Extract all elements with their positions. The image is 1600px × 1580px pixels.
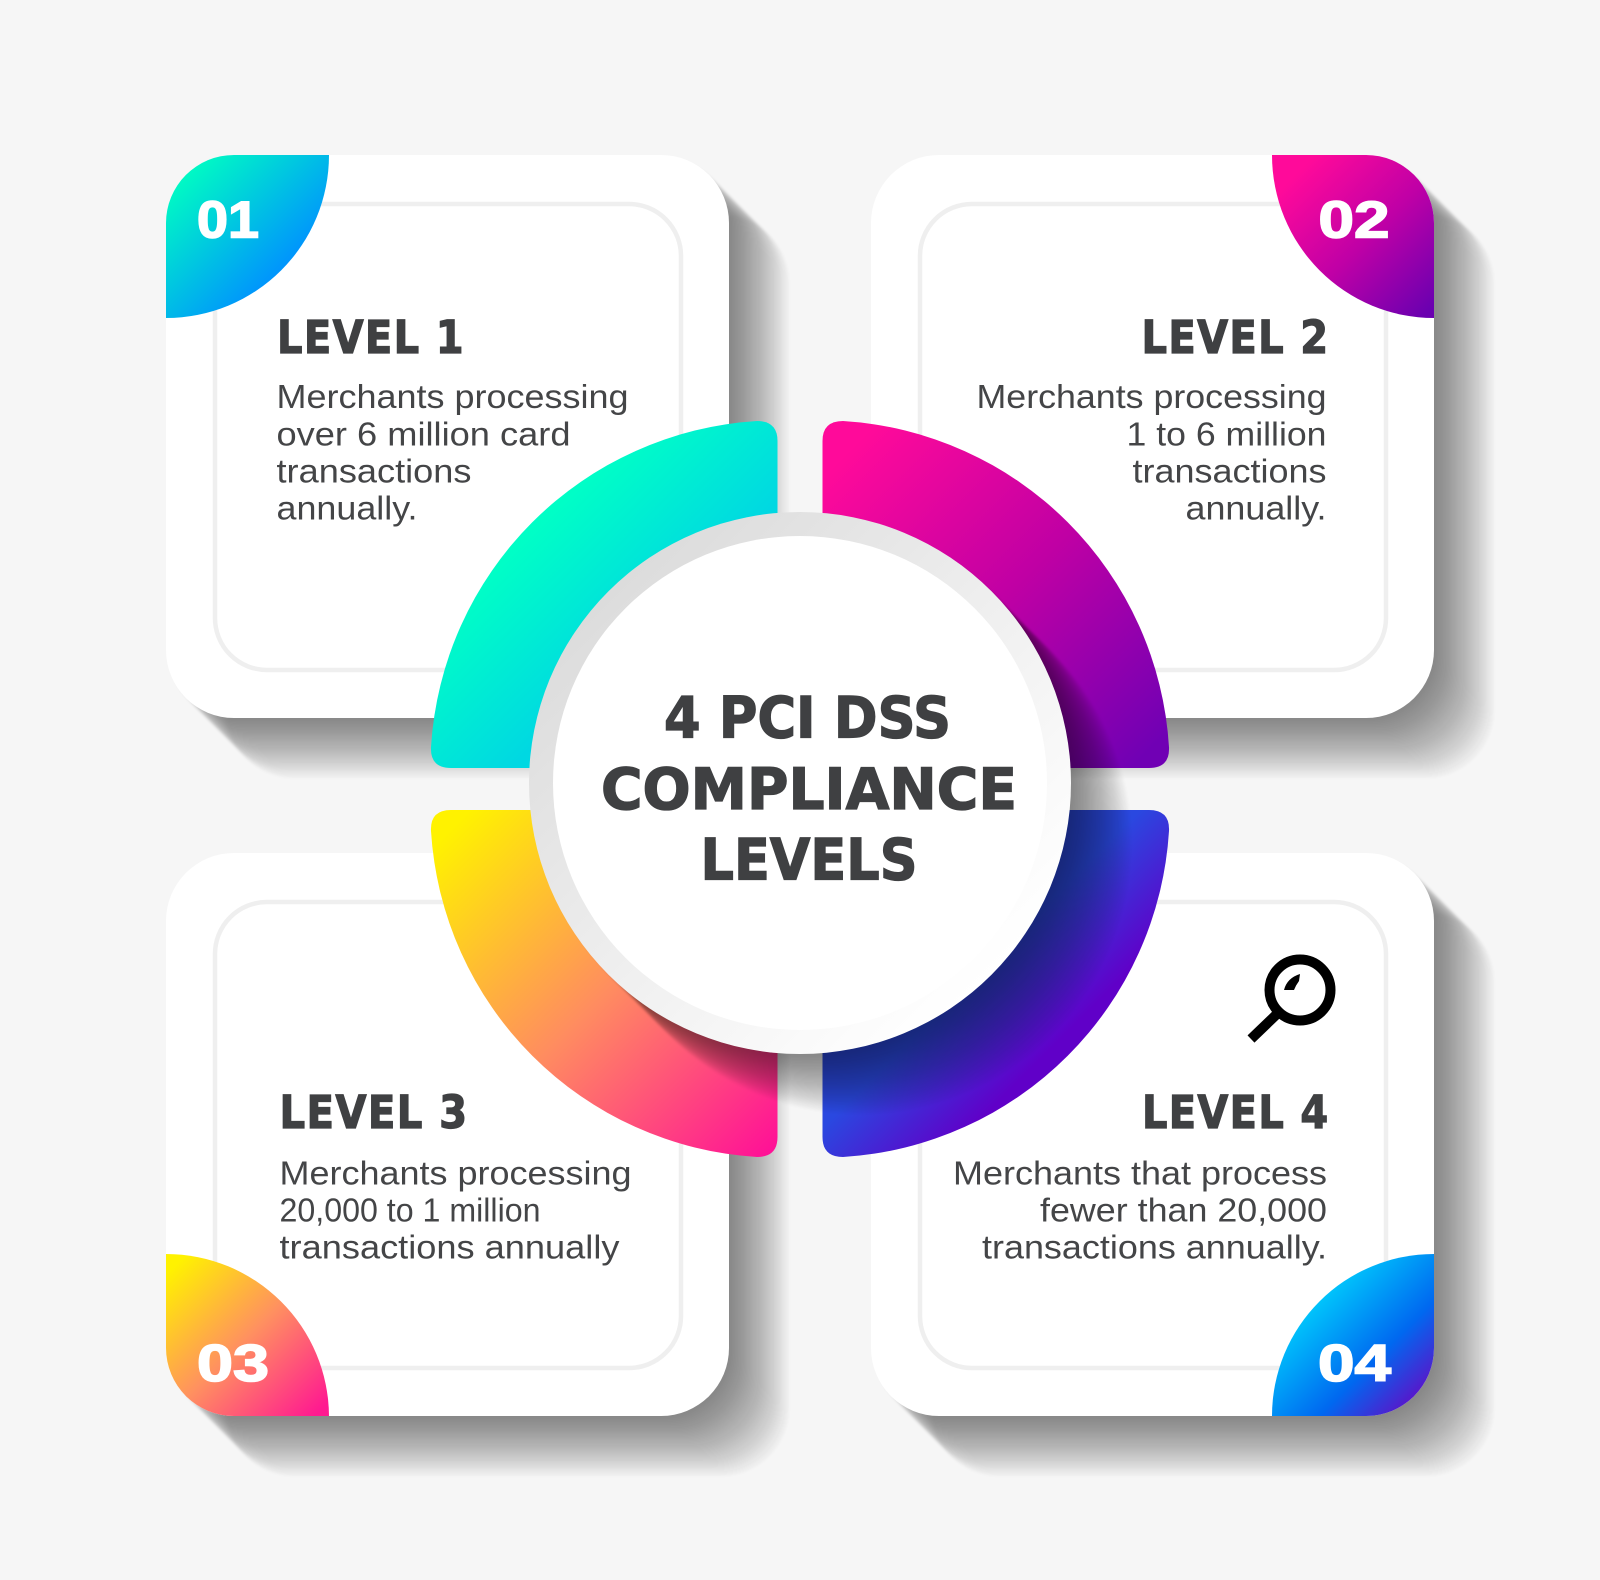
panel: level 1	[166, 155, 729, 718]
text: level 1 description: transactions	[276, 452, 472, 490]
text: level 3 description: transactions annually	[280, 1228, 620, 1266]
badge: 03	[166, 1254, 329, 1416]
arc: bottom left segment	[431, 810, 778, 1157]
text: level 4 description: transactions annually.	[982, 1228, 1327, 1266]
text: level 3 description: Merchants processing	[280, 1154, 632, 1192]
text: level 4 description: fewer than 20,000	[1040, 1192, 1327, 1228]
heading: level 3: LEVEL 3	[280, 1086, 468, 1139]
badge: 01	[166, 155, 329, 318]
text: level 4 description	[953, 1154, 1327, 1266]
card shadows	[169, 158, 1494, 1476]
text: level 4 description: Merchants that process	[953, 1154, 1327, 1192]
text: level 2 description: Merchants processing	[976, 378, 1326, 415]
heading: level 1: LEVEL 1	[277, 311, 465, 364]
text: level 1 description	[276, 378, 628, 526]
title: 4 PCI DSS	[664, 686, 951, 752]
badge: 02: 02	[1318, 192, 1390, 250]
arc: bottom right segment	[822, 810, 1169, 1157]
arc: top right segment	[822, 421, 1169, 768]
badge: 02	[1272, 155, 1434, 318]
heading: level 4: LEVEL 4	[1142, 1086, 1330, 1139]
badge: 04	[1272, 1254, 1434, 1416]
badge: 01: 01	[197, 192, 259, 250]
text: level 1 description: Merchants processing	[276, 378, 628, 415]
title: COMPLIANCE	[601, 757, 1017, 823]
text: level 2 description: annually.	[1186, 490, 1326, 526]
panel: level 3	[166, 853, 729, 1416]
badge: 04: 04	[1318, 1335, 1391, 1393]
centre circle shadow	[532, 515, 1131, 1114]
text: level 1 description: annually.	[276, 490, 418, 526]
heading: level 2: LEVEL 2	[1142, 311, 1330, 364]
text: level 2 description	[976, 378, 1326, 526]
panel: level 2	[871, 155, 1434, 718]
text: level 3 description: 20,000 to 1 million	[280, 1192, 540, 1228]
arc: top left segment	[431, 421, 778, 768]
panel: level 4	[871, 853, 1434, 1416]
icon: magnifying glass	[1251, 960, 1330, 1039]
text: level 1 description: over 6 million card	[276, 416, 570, 452]
title: LEVELS	[700, 828, 918, 894]
text: level 2 description: 1 to 6 million	[1126, 416, 1326, 452]
title	[601, 686, 1017, 894]
badge: 03: 03	[197, 1335, 269, 1393]
centre circle	[529, 512, 1071, 1054]
text: level 2 description: transactions	[1132, 452, 1326, 490]
text: level 3 description	[280, 1154, 632, 1266]
